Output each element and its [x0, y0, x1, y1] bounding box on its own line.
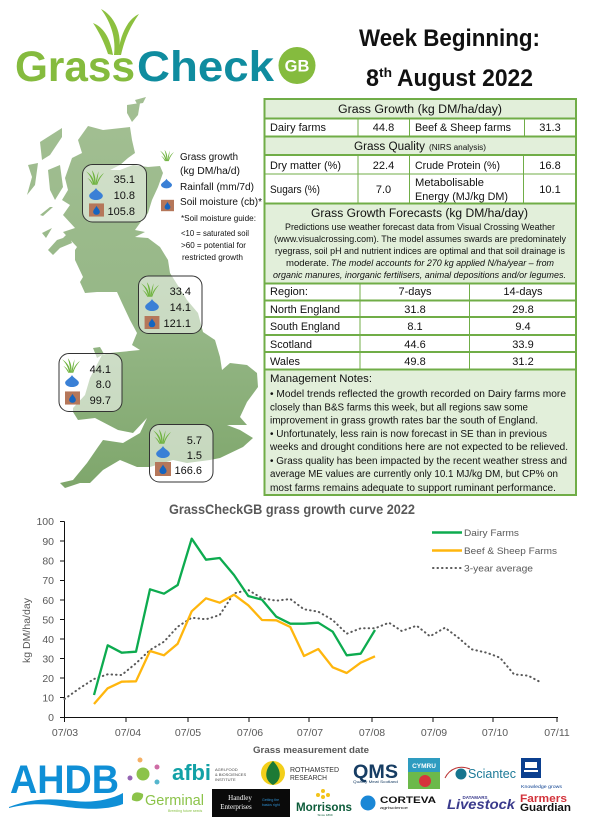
y axis labels: 30: [42, 654, 54, 666]
grass quality table: 16.8: [539, 160, 561, 172]
logo: Rothamsted Research: [261, 761, 340, 785]
x axis labels: 07/07: [297, 727, 323, 739]
x axis labels: 07/11: [544, 727, 570, 739]
grass growth table: 44.8: [373, 122, 394, 134]
logo: Germinal: [132, 792, 204, 813]
callout: North England: 121.1: [163, 318, 191, 330]
y axis labels: [36, 516, 54, 724]
management notes: [269, 373, 568, 494]
management notes: • Grass quality has been impacted by the recent weather stress and: [270, 456, 567, 467]
logo: Morrisons: [296, 789, 352, 817]
y axis labels: 40: [42, 634, 54, 646]
x axis labels: 07/06: [237, 727, 263, 739]
y axis labels: 50: [42, 614, 54, 626]
grass quality table: 22.4: [373, 160, 394, 172]
map islands: [48, 233, 72, 255]
logo: CIEL: [128, 758, 160, 784]
logo: Rothamsted Research: RESEARCH: [290, 773, 327, 782]
regional forecast table: South England: [270, 321, 340, 333]
logo: Hybu Cig Cymru: [408, 758, 440, 789]
title: week beginning: th: [379, 65, 392, 80]
logo: GrassCheck GB: GB: [285, 58, 309, 76]
map of Great Britain: [27, 97, 258, 488]
logo: afbi: INSTITUTE: [215, 777, 236, 782]
chart: grass growth curve: [22, 502, 570, 756]
map legend: [160, 150, 262, 262]
logo: Sciantec: [445, 767, 516, 781]
callout: Wales: 99.7: [90, 395, 111, 407]
logo: Farmers Guardian: Farmers: [520, 793, 567, 805]
callout: Wales: 44.1: [90, 364, 111, 376]
callout: South East England: [150, 424, 213, 482]
regional forecast table: Scotland: [270, 339, 312, 351]
regional forecast table: 7-days: [398, 286, 432, 298]
logo: Yara: [521, 758, 563, 789]
regional forecast table: 8.1: [407, 321, 423, 333]
y axis labels: 0: [48, 712, 54, 724]
grass quality table: 7.0: [376, 184, 391, 196]
grass quality table: Metabolisable: [415, 177, 484, 189]
x axis labels: 07/09: [421, 727, 447, 739]
sponsor logos: [9, 758, 571, 817]
logo: GrassCheck GB: Grass: [15, 43, 135, 91]
logo: GrassCheck GB: Check: [137, 43, 274, 91]
logo: Germinal: Germinal: [145, 792, 204, 809]
logo: Corteva: agriscience: [380, 805, 409, 810]
title: week beginning: [359, 25, 540, 92]
y axis labels: 90: [42, 536, 54, 548]
callout: Scotland: 105.8: [107, 206, 135, 218]
line: Beef & Sheep Farms: [94, 595, 375, 704]
grass growth table: Beef & Sheep farms: [415, 122, 511, 134]
logo: Sciantec: Sciantec: [468, 767, 516, 781]
regional forecast table: [270, 286, 543, 368]
y axis labels: 100: [36, 516, 54, 528]
grass growth forecasts text: organic manures, inorganic fertilisers, animal depositions and/or legumes.: [273, 270, 566, 281]
map legend: restricted growth: [182, 252, 243, 262]
grass growth forecasts text: Predictions use weather forecast data from Visual Crossing Weather: [285, 222, 555, 233]
grass growth forecasts text: ryegrass, soil pH and nutrient indices are optimal and that soil drainage is: [275, 246, 565, 257]
logo: Handley Enterprises: [212, 789, 290, 817]
grass quality table: Energy (MJ/kg DM): [415, 191, 508, 203]
chart axes: [60, 522, 558, 722]
title: week beginning: August 2022: [397, 65, 533, 92]
map legend: *Soil moisture guide:: [181, 213, 256, 223]
callout: South East England: 1.5: [187, 450, 202, 462]
grass quality table: [270, 141, 561, 203]
logo: afbi: AGRI-FOOD: [215, 767, 238, 772]
callout: North England: 14.1: [170, 302, 191, 314]
callout: Scotland: 10.8: [114, 190, 135, 202]
regional forecast table: Wales: [270, 356, 300, 368]
grass quality table: (NIRS analysis): [429, 143, 486, 152]
map legend: Soil moisture (cb)*: [180, 197, 262, 208]
chart legend: 3-year average: [464, 564, 533, 574]
grass quality table: 10.1: [539, 184, 561, 196]
management notes: closely than B&S farms this week, but all regions saw some: [270, 402, 528, 414]
chart legend: Dairy Farms: [464, 528, 519, 539]
logo: Rothamsted Research: ROTHAMSTED: [290, 765, 340, 774]
map legend: Rainfall (mm/7d): [180, 182, 254, 193]
regional forecast table: North England: [270, 304, 340, 316]
x axis labels: 07/04: [115, 727, 141, 739]
regional forecast table: 29.8: [512, 304, 534, 316]
chart legend: Beef & Sheep Farms: [464, 546, 557, 557]
grass growth forecasts text: (www.visualcrossing.com). The model assumes swards are predominately: [274, 234, 566, 245]
logo: Handley Enterprises: basics right: [262, 803, 280, 807]
logo: Farmers Guardian: Guardian: [520, 802, 571, 814]
logo: afbi: & BIOSCIENCES: [215, 772, 246, 777]
management notes: improvement in grass growth rates bar the south of England.: [270, 416, 538, 426]
logo: Handley Enterprises: Enterprises: [220, 803, 252, 811]
title: week beginning: 8: [366, 65, 379, 92]
grass growth table: 31.3: [539, 122, 561, 134]
regional forecast table: 33.9: [512, 339, 534, 351]
y axis labels: 60: [42, 595, 54, 607]
map legend: <10 = saturated soil: [181, 228, 249, 238]
regional forecast table: 14-days: [503, 286, 543, 298]
logo: QMS: Quality Meat Scotland: [353, 780, 398, 784]
logo: Hybu Cig Cymru: CYMRU: [412, 763, 436, 770]
callout: North England: [138, 276, 202, 334]
management notes: average ME values are currently only 10.1 MJ/kg DM, but CP% on: [270, 469, 558, 480]
chart title: GrassCheckGB grass growth curve 2022: [169, 502, 415, 517]
logo: afbi: [172, 760, 246, 785]
logo: Yara: Knowledge grows: [521, 784, 563, 789]
logo: Datamars Livestock: DATAMARS: [462, 795, 488, 800]
regional forecast table: Region:: [270, 286, 308, 298]
grass growth forecasts text: The model accounts for 270 kg applied N/ha/year – from: [331, 258, 554, 269]
grass growth table: Dairy farms: [270, 122, 326, 134]
logo: Handley Enterprises: Getting the: [262, 798, 279, 802]
regional forecast table: 31.8: [404, 304, 426, 316]
grass growth forecasts text: moderate.: [286, 258, 329, 269]
logo: Morrisons: Since 1899: [317, 813, 333, 817]
callout: Wales: 8.0: [96, 379, 111, 391]
grass growth table: Grass Growth (kg DM/ha/day): [338, 104, 502, 116]
x axis labels: 07/05: [175, 727, 201, 739]
x axis title: Grass measurement date: [253, 745, 369, 756]
line: 3-year average: [64, 590, 541, 699]
panel: data tables: [264, 99, 576, 495]
map legend: Grass growth: [180, 152, 238, 163]
grass quality table: Crude Protein (%): [415, 160, 500, 172]
management notes: • Unfortunately, less rain is now forecast in SE than in previous: [270, 429, 547, 440]
grass growth forecasts text: Grass Growth Forecasts (kg DM/ha/day): [311, 208, 528, 220]
logo: Germinal: Breeding future seeds: [168, 809, 202, 813]
management notes: weeks and drought conditions here are not expected to be relieved.: [269, 442, 568, 453]
chart legend: [432, 528, 557, 574]
x axis labels: 07/08: [359, 727, 385, 739]
callout: Scotland: 35.1: [114, 174, 135, 186]
grass quality table: Sugars (%): [270, 184, 320, 196]
y axis title: kg DM/ha/day: [22, 598, 33, 663]
logo: AHDB: AHDB: [10, 758, 119, 802]
x axis labels: 07/10: [482, 727, 508, 739]
management notes: • Model trends reflected the growth recorded on Dairy farms more: [270, 389, 566, 400]
logo: Morrisons: Morrisons: [296, 800, 352, 814]
regional forecast table: 44.6: [404, 339, 426, 351]
logo: Corteva: [360, 795, 436, 810]
y axis labels: 20: [42, 673, 54, 685]
map legend: (kg DM/ha/d): [180, 166, 240, 177]
regional forecast table: 31.2: [512, 356, 534, 368]
grass growth table: [270, 104, 561, 134]
map legend: >60 = potential for: [181, 240, 246, 250]
grass quality table: Grass Quality: [354, 141, 425, 153]
title: week beginning: Week Beginning:: [359, 25, 540, 52]
callout: Scotland: [82, 164, 146, 222]
x axis labels: [52, 727, 570, 739]
logo: Farmers Guardian: [520, 793, 571, 814]
x axis labels: 07/03: [52, 727, 78, 739]
callout: South East England: 166.6: [174, 465, 202, 477]
logo: GrassCheck GB: [15, 9, 316, 91]
grass quality table: Dry matter (%): [270, 160, 341, 172]
callout: South East England: 5.7: [187, 435, 202, 447]
callout: Wales: [59, 354, 122, 412]
management notes: Management Notes:: [270, 373, 372, 385]
y axis labels: 10: [42, 692, 54, 704]
y axis labels: 80: [42, 556, 54, 568]
management notes: most farms remains adequate to support ruminant performance.: [270, 483, 556, 494]
regional forecast table: 9.4: [515, 321, 531, 333]
logo: Datamars Livestock: Livestock: [447, 797, 517, 812]
logo: Corteva: CORTEVA: [380, 795, 436, 806]
logo: afbi: afbi: [172, 760, 211, 785]
logo: QMS: QMS: [353, 762, 398, 783]
line: Dairy Farms: [94, 539, 375, 695]
regional forecast table: 49.8: [404, 356, 426, 368]
logo: Handley Enterprises: Handley: [228, 794, 252, 802]
grass growth forecasts text: [273, 208, 566, 281]
callout: North England: 33.4: [170, 286, 191, 298]
y axis labels: 70: [42, 575, 54, 587]
